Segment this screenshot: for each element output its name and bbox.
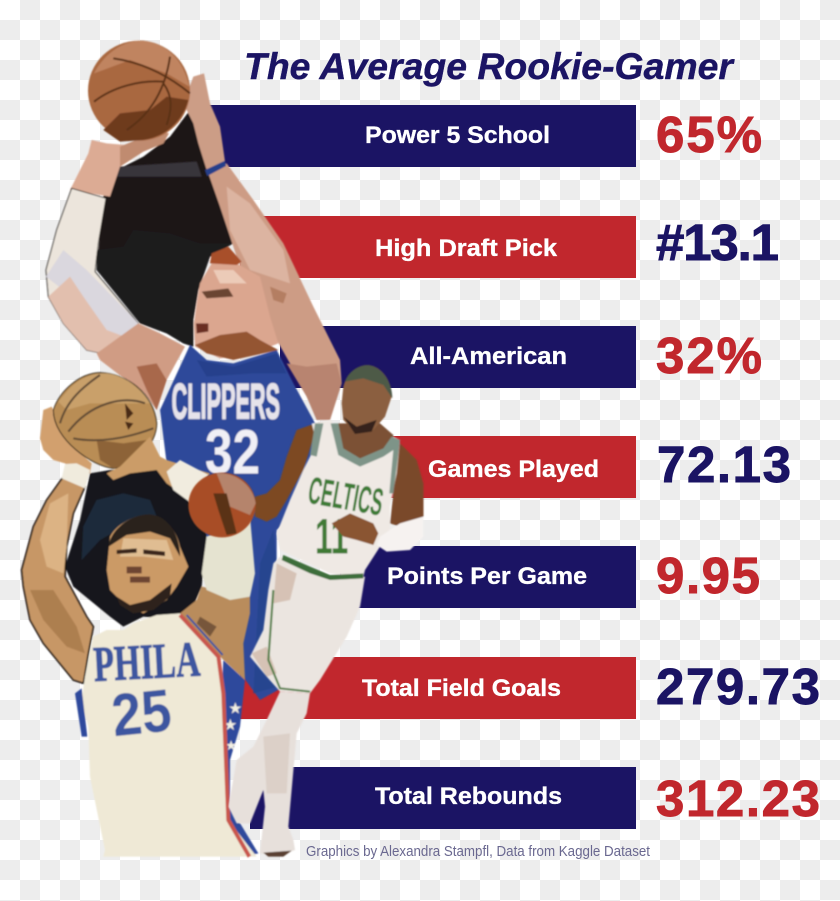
bar: High Draft Pick [240,216,636,278]
left arm [22,477,93,683]
value: #13.1: #13.1 [656,214,779,271]
dark backdrop behind arms [97,110,233,347]
left hand [40,407,92,473]
shooting arm left [70,128,169,197]
value: 312.23: 312.23 [656,770,820,827]
jersey [82,613,257,857]
bar: All-American [280,326,636,388]
bar: Total Field Goals: Total Field Goals [362,675,561,702]
bar: High Draft Pick: High Draft Pick [375,235,558,262]
right upper arm [180,587,250,680]
player: Sixers 25 [22,373,258,857]
value: 9.95: 9.95 [656,547,760,604]
bar: Power 5 School [205,105,636,167]
neck and chest [338,423,393,463]
bar: Games Played [360,436,636,498]
head [342,365,392,433]
jersey number 11: 11 [315,508,348,564]
player: Clippers 32 [46,41,342,700]
bar: All-American: All-American [410,343,567,370]
sleeve [377,517,423,552]
shorts side panel: ★ [225,738,237,753]
bar: Total Rebounds [250,767,636,829]
dark backdrop [65,467,207,627]
belt [282,555,363,580]
jersey number 32: 32 [205,417,260,487]
face [194,263,278,358]
shorts [250,557,365,693]
ball [188,473,256,537]
bar: Total Rebounds: Total Rebounds [375,783,562,810]
hand [332,513,378,545]
bar: Games Played: Games Played [428,456,599,483]
value: 32%: 32% [656,327,762,384]
player: Clippers 32: CLIPPERS [172,373,280,429]
right arm [390,443,423,527]
shorts side panel: ★ [228,700,242,717]
value: 65%: 65% [656,106,762,163]
bar: Total Field Goals [240,657,636,719]
head [107,515,188,613]
jersey number 25: 25 [108,676,174,749]
jersey [277,420,400,577]
shorts side panel: ★ [223,717,237,734]
ball [88,41,190,141]
jersey [160,345,333,700]
bar: Power 5 School: Power 5 School [365,122,550,149]
wristband left [62,463,90,488]
ball [53,373,157,468]
value: 279.73: 279.73 [656,658,820,715]
jersey text: PHILA: PHILA [92,631,201,692]
right hand on ball [107,437,210,500]
player: Celtics 11: CELTICS [305,469,386,525]
bar: Points Per Game [340,546,636,608]
bar: Points Per Game: Points Per Game [387,563,587,590]
wristband right [167,460,208,503]
right arm [208,163,342,420]
shorts side panel [222,660,258,857]
wristband [205,161,226,176]
player: Celtics 11 [188,365,423,857]
left arm [255,422,320,522]
value: 72.13: 72.13 [657,436,791,493]
title: The Average Rookie-Gamer [244,46,736,87]
sleeve [202,517,255,600]
credit line: Graphics by Alexandra Stampfl, Data from Kaggle Dataset [306,844,650,860]
leg and shoe [228,692,310,857]
